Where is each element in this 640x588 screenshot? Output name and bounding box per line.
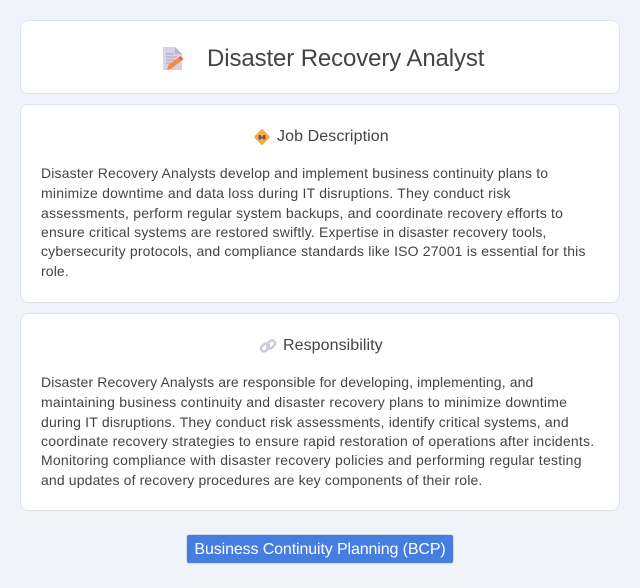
title: Disaster Recovery Analyst	[207, 45, 484, 72]
text block: responsibility: and updates of recovery procedures are key components of their role.	[41, 472, 482, 488]
icon: document with pencil	[163, 47, 184, 70]
text block: job description: cybersecurity protocols, and compliance standards like ISO 27001 is essential for this	[41, 243, 586, 259]
text block: job description: assessments, perform regular system backups, and coordinate recovery efforts to	[41, 205, 563, 221]
heading: responsibility: Responsibility	[283, 337, 383, 354]
text block: responsibility: Monitoring compliance with disaster recovery policies and performing regular testing	[41, 452, 582, 468]
text block: responsibility: coordinate recovery strategies to ensure rapid restoration of operations after incidents.	[41, 433, 594, 449]
text block: responsibility: during IT disruptions. They conduct risk assessments, identify critical systems, and	[41, 414, 569, 430]
panel: responsibility	[20, 313, 620, 511]
panel: title card	[20, 20, 620, 94]
button: business continuity planning	[186, 534, 454, 564]
text block: responsibility: maintaining business continuity and disaster recovery plans to minimize downtime	[41, 394, 567, 410]
icon: orange diamond sign	[254, 129, 270, 145]
heading: job description: Job Description	[277, 128, 389, 145]
text block: responsibility	[41, 374, 594, 488]
text block: responsibility: Disaster Recovery Analysts are responsible for developing, implementing, and	[41, 374, 533, 390]
text block: job description: ensure critical systems are restored swiftly. Expertise in disaster recovery tools,	[41, 224, 547, 240]
text block: job description: role.	[41, 263, 69, 279]
text block: job description: minimize downtime and data loss during IT disruptions. They conduct risk	[41, 185, 511, 201]
text block: job description: Disaster Recovery Analysts develop and implement business continuity plans to	[41, 165, 548, 181]
panel: job description	[20, 104, 620, 303]
icon: chain link	[260, 339, 276, 353]
text block: job description	[41, 165, 586, 279]
button: business continuity planning: Business Continuity Planning (BCP)	[194, 541, 446, 558]
